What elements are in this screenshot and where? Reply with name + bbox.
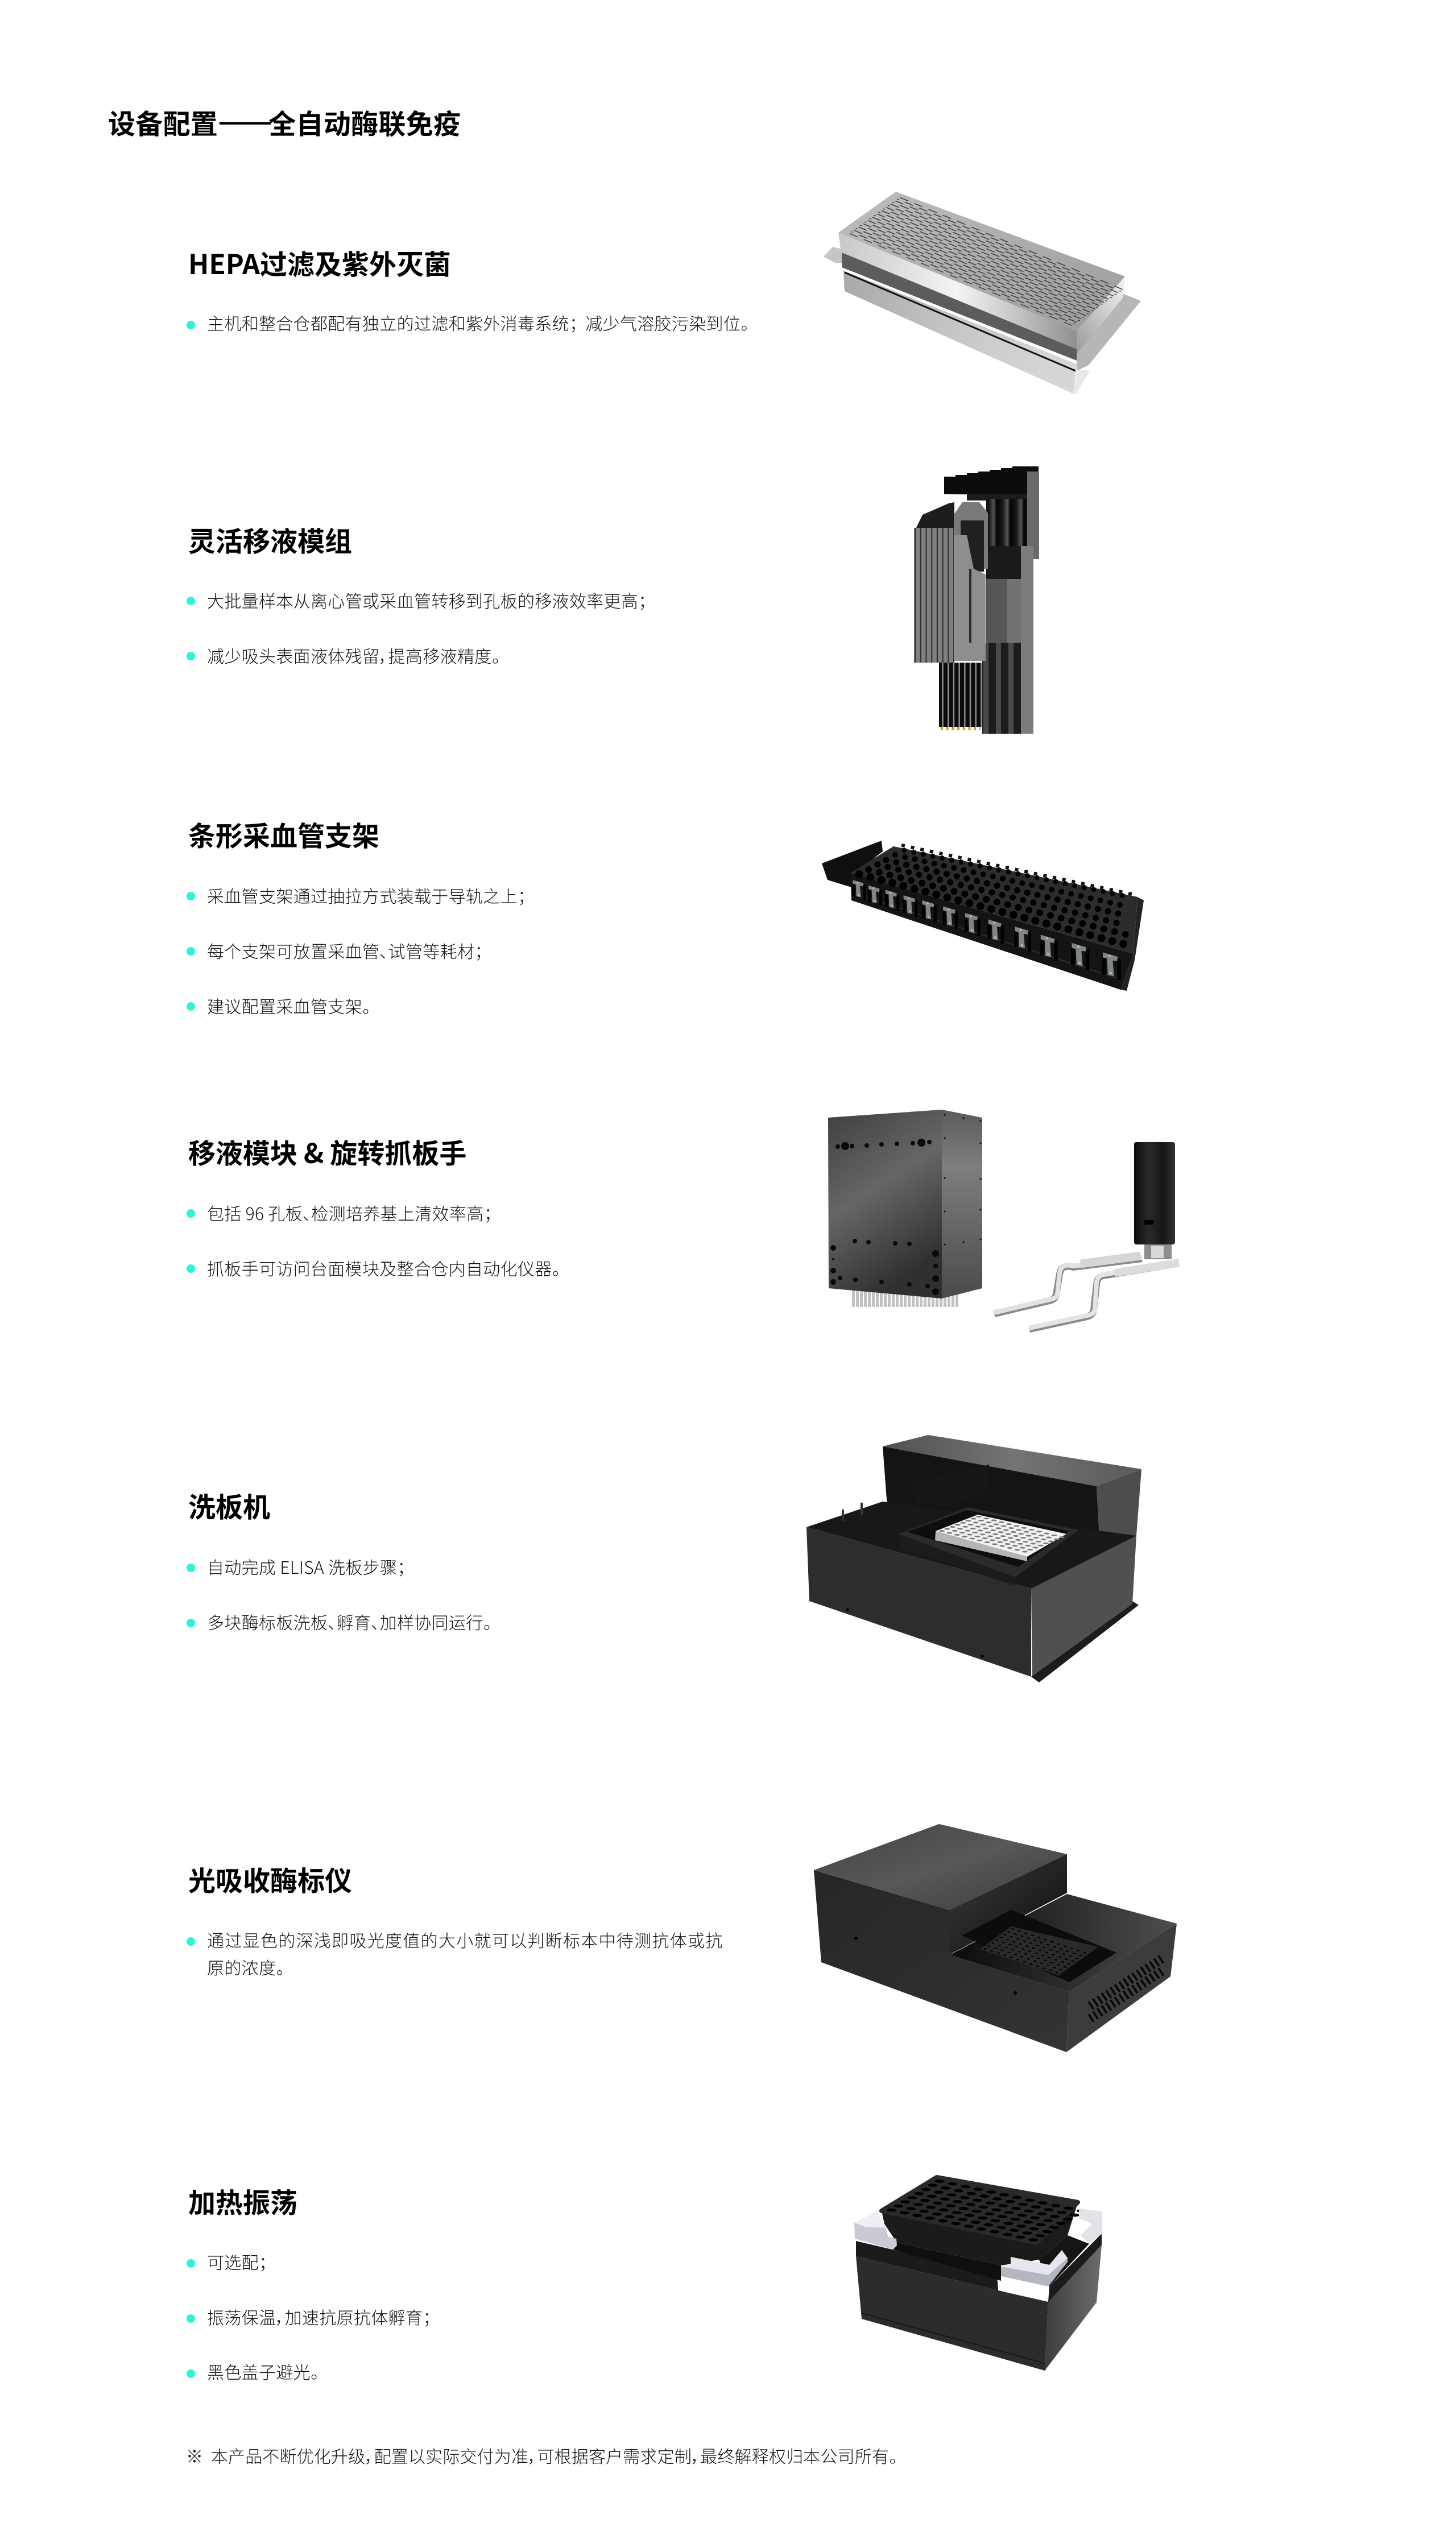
bullet dot 2	[187, 652, 195, 660]
heading: HEPA: HEPA过滤及紫外灭菌	[188, 242, 451, 282]
panel: pipetting module and gripper text	[187, 1131, 561, 1280]
bullet text 3: 建议配置采血管支架。	[207, 993, 371, 1018]
bullet text 1: 可选配；	[207, 2249, 267, 2274]
bullet dot	[187, 321, 195, 329]
illustration: HEPA filter	[824, 192, 1141, 394]
bullet dot	[187, 1937, 195, 1946]
illustration: pipetting module	[914, 466, 1039, 734]
footnote: ※ 本产品不断优化升级，配置以实际交付为准，可根据客户需求定制，最终解释权归本公司所有。	[186, 2443, 897, 2468]
bullet dot 1	[187, 1564, 195, 1572]
bullet dot 2	[187, 947, 195, 956]
illustration: rotating gripper	[993, 1142, 1180, 1333]
title: 设备配置——全自动酶联免疫	[108, 102, 461, 142]
heading: tube rack: 条形采血管支架	[188, 814, 379, 854]
panel: microplate reader text	[187, 1859, 723, 1979]
bullet text: 通过显色的深浅即吸光度值的大小就可以判断标本中待测抗体或抗	[207, 1927, 723, 1952]
bullet dot 1	[187, 892, 195, 900]
illustration: pipetting block	[828, 1110, 982, 1307]
illustration: tube rack	[822, 841, 1144, 991]
heading: pipetting module: 灵活移液模组	[188, 519, 352, 559]
heading: plate washer: 洗板机	[188, 1485, 270, 1525]
bullet text 1: 大批量样本从离心管或采血管转移到孔板的移液效率更高；	[207, 588, 647, 613]
panel: barcode tube rack text	[187, 814, 526, 1018]
panel: heater shaker text	[187, 2181, 432, 2384]
bullet text 2: 抓板手可访问台面模块及整合仓内自动化仪器。	[207, 1255, 561, 1280]
panel: pipetting module text	[187, 519, 647, 668]
illustration: microplate reader	[814, 1824, 1177, 2052]
bullet text 1: 包括 96 孔板、检测培养基上清效率高；	[207, 1200, 493, 1225]
bullet dot 1	[187, 2259, 195, 2268]
bullet text 2: 多块酶标板洗板、孵育、加样协同运行。	[207, 1609, 492, 1634]
panel: plate washer text	[187, 1485, 492, 1634]
bullet text 2: 振荡保温，加速抗原抗体孵育；	[207, 2304, 432, 2329]
panel: HEPA filter text	[187, 242, 750, 335]
illustration: plate washer	[806, 1435, 1141, 1682]
bullet text 2: 每个支架可放置采血管、试管等耗材；	[207, 938, 483, 963]
bullet text 1: 自动完成 ELISA 洗板步骤；	[207, 1554, 406, 1579]
bullet text 3: 黑色盖子避光。	[207, 2359, 319, 2384]
heading: microplate reader: 光吸收酶标仪	[188, 1859, 352, 1899]
bullet dot 1	[187, 1209, 195, 1218]
illustration: heater shaker	[854, 2175, 1102, 2371]
bullet dot 3	[187, 1002, 195, 1011]
bullet text 1: 采血管支架通过抽拉方式装载于导轨之上；	[207, 883, 526, 908]
bullet text	[207, 1927, 723, 1979]
bullet text: 原的浓度。	[207, 1954, 285, 1979]
heading: module and gripper: 移液模块 & 旋转抓板手	[188, 1131, 466, 1171]
bullet dot 2	[187, 1264, 195, 1273]
bullet dot 3	[187, 2369, 195, 2378]
bullet dot 2	[187, 2314, 195, 2323]
bullet dot 2	[187, 1619, 195, 1627]
bullet dot 1	[187, 597, 195, 605]
bullet text 2: 减少吸头表面液体残留，提高移液精度。	[207, 643, 500, 668]
bullet text: 主机和整合仓都配有独立的过滤和紫外消毒系统； 减少气溶胶污染到位。	[207, 310, 750, 335]
heading: heater shaker: 加热振荡	[188, 2181, 297, 2220]
